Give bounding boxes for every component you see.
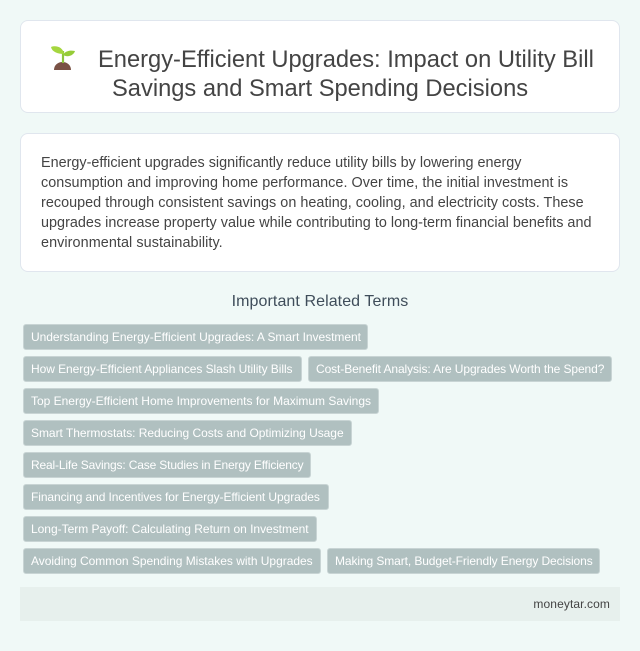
title: Savings and Smart Spending Decisions bbox=[112, 76, 528, 102]
tag: Financing and Incentives for Energy-Efficient Upgrades bbox=[31, 490, 320, 504]
tag bbox=[23, 516, 317, 542]
tag: Understanding Energy-Efficient Upgrades: A Smart Investment bbox=[31, 330, 361, 344]
summary text: recouped through consistent savings on heating, cooling, and electricity costs. These bbox=[41, 195, 584, 211]
tag: Avoiding Common Spending Mistakes with Upgrades bbox=[31, 554, 313, 568]
tag: Long-Term Payoff: Calculating Return on Investment bbox=[31, 522, 309, 536]
summary text bbox=[41, 155, 592, 251]
title bbox=[98, 47, 594, 102]
footer text: moneytar.com bbox=[533, 597, 610, 611]
tag bbox=[23, 484, 329, 510]
tag bbox=[23, 452, 311, 478]
tag: Top Energy-Efficient Home Improvements for Maximum Savings bbox=[31, 394, 371, 408]
summary text: consumption and improving home performance. Over time, the initial investment is bbox=[41, 175, 568, 191]
tag bbox=[23, 548, 321, 574]
tag: Smart Thermostats: Reducing Costs and Optimizing Usage bbox=[31, 426, 344, 440]
tag bbox=[327, 548, 600, 574]
title: Energy-Efficient Upgrades: Impact on Utility Bill bbox=[98, 47, 594, 73]
icon: seedling bbox=[51, 46, 75, 70]
tag bbox=[23, 388, 379, 414]
summary text: environmental sustainability. bbox=[41, 235, 223, 251]
tag: How Energy-Efficient Appliances Slash Utility Bills bbox=[31, 362, 292, 376]
summary text: upgrades increase property value while contributing to long-term financial benefits and bbox=[41, 215, 592, 231]
tag bbox=[23, 420, 352, 446]
heading: important related terms: Important Related Terms bbox=[232, 293, 408, 310]
footer bar bbox=[20, 587, 620, 621]
tag: Making Smart, Budget-Friendly Energy Decisions bbox=[335, 554, 593, 568]
tag bbox=[23, 324, 368, 350]
panel: summary card bbox=[20, 133, 620, 272]
tag: Cost-Benefit Analysis: Are Upgrades Worth the Spend? bbox=[316, 362, 604, 376]
tag bbox=[23, 356, 302, 382]
tag bbox=[308, 356, 612, 382]
panel: header card bbox=[20, 20, 620, 113]
tag: Real-Life Savings: Case Studies in Energy Efficiency bbox=[31, 458, 303, 472]
summary text: Energy-efficient upgrades significantly reduce utility bills by lowering energy bbox=[41, 155, 521, 171]
